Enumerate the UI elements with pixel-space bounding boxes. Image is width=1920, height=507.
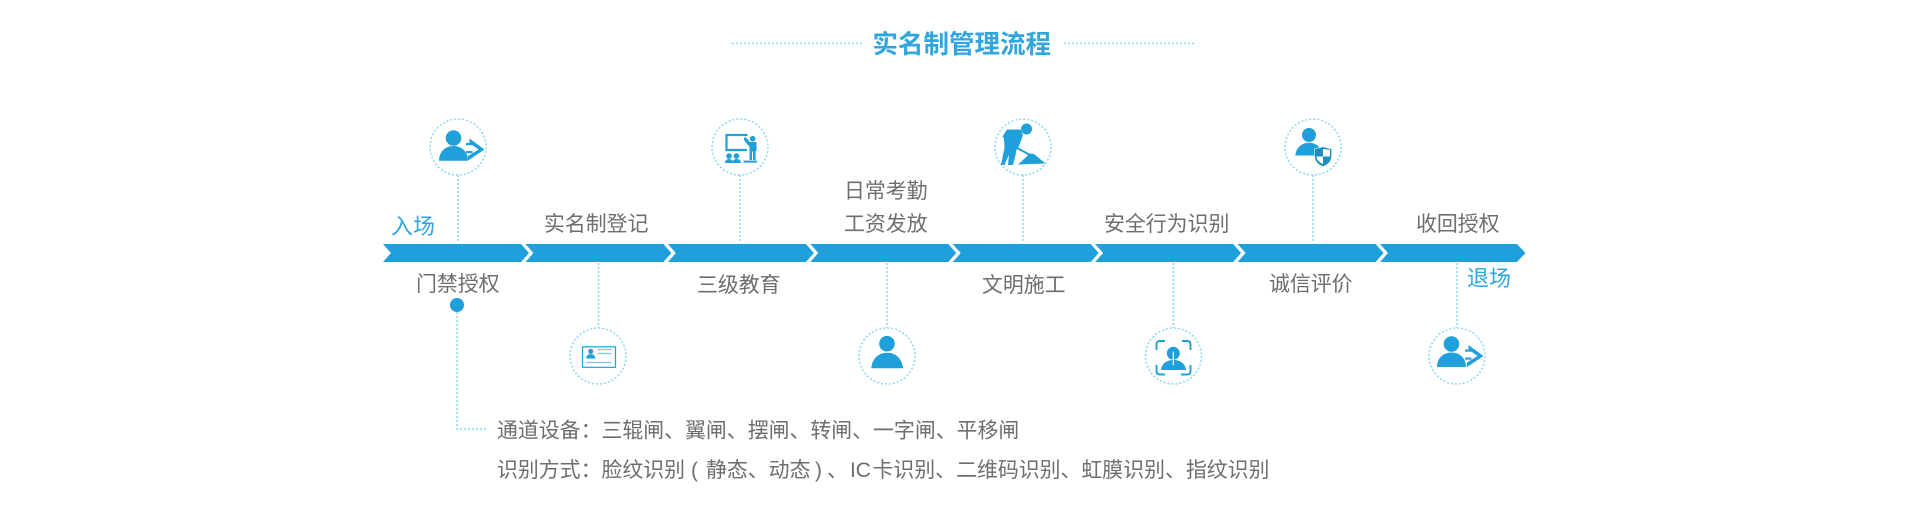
icon: training board xyxy=(712,119,768,175)
icon: person exiting xyxy=(1429,328,1485,384)
details text: IC xyxy=(850,459,871,482)
label: 日常考勤 工资发放: 日常考勤 xyxy=(844,180,928,203)
label: 实名制登记: 实名制登记 xyxy=(544,213,649,236)
details text: 识别方式：脸纹识别 xyxy=(497,459,685,482)
title: 实名制管理流程 xyxy=(872,31,1051,59)
marker dot xyxy=(450,298,464,312)
details text: ) xyxy=(815,459,822,482)
label: 安全行为识别: 安全行为识别 xyxy=(1104,213,1229,236)
icon: worker profile xyxy=(859,328,915,384)
details text: 静态、动态 xyxy=(706,459,810,482)
label: 门禁授权: 门禁授权 xyxy=(416,273,500,296)
details text: 通道设备：三辊闸、翼闸、摆闸、转闸、一字闸、平移闸 xyxy=(497,420,1019,442)
label: 收回授权: 收回授权 xyxy=(1416,213,1500,236)
label: 文明施工: 文明施工 xyxy=(982,274,1066,297)
details text xyxy=(497,420,1269,482)
details text: ( xyxy=(691,459,698,482)
icon: face recognition xyxy=(1146,328,1202,384)
timeline arrow bar xyxy=(383,244,1526,262)
label: 退场: 退场 xyxy=(1467,266,1511,291)
label: 三级教育: 三级教育 xyxy=(697,274,781,297)
details text: 、 xyxy=(827,459,848,482)
label: 日常考勤 工资发放: 工资发放 xyxy=(844,213,928,236)
label: 日常考勤 工资发放 xyxy=(844,180,928,236)
icon: id card xyxy=(570,328,626,384)
label: 入场: 入场 xyxy=(391,214,435,239)
icon: person with shield xyxy=(1285,119,1341,175)
icon: person entering xyxy=(430,119,486,175)
details text: 卡识别、二维码识别、虹膜识别、指纹识别 xyxy=(872,459,1269,482)
icon: construction worker xyxy=(995,119,1051,175)
label: 诚信评价: 诚信评价 xyxy=(1269,273,1353,296)
